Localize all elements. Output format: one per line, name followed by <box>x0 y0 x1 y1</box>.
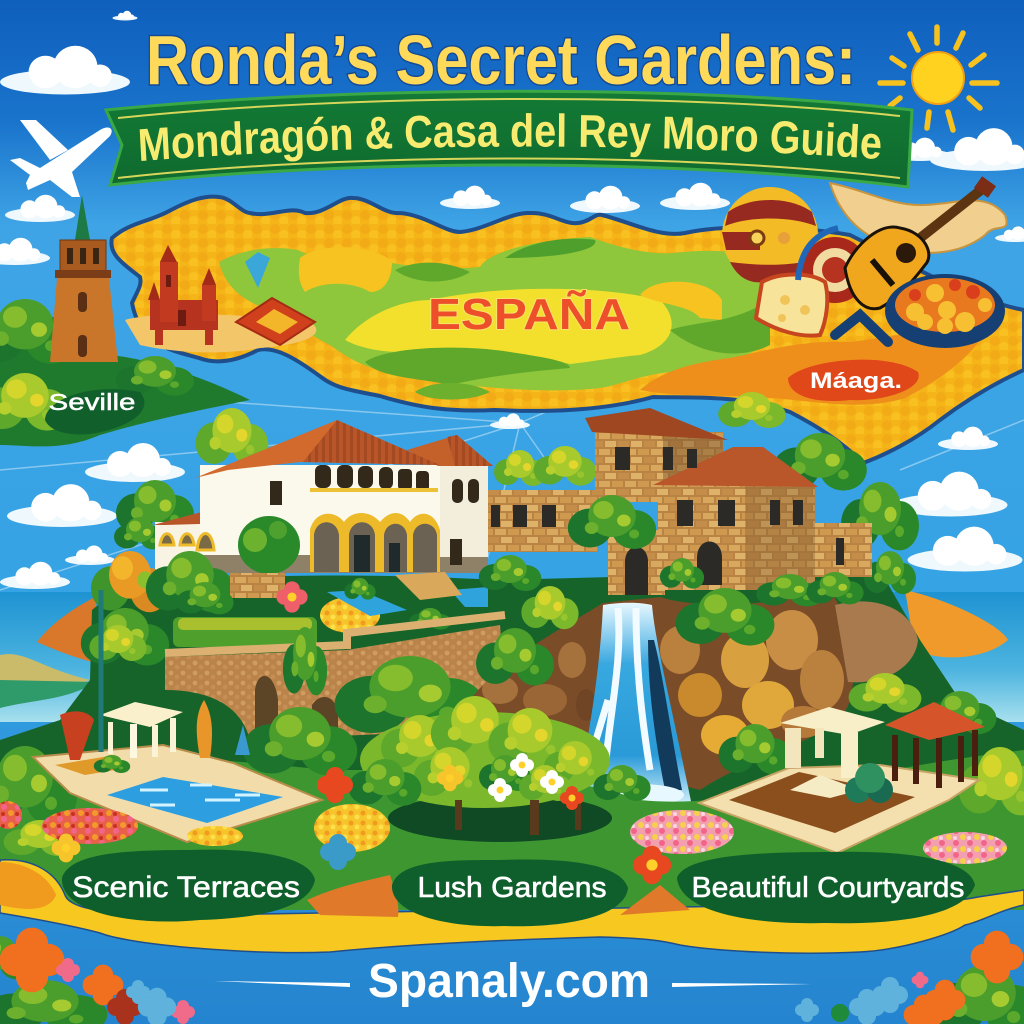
sea horizon <box>0 592 1024 722</box>
footer: Spanaly.com: Spanaly.com <box>368 955 650 1008</box>
arcade <box>310 513 440 572</box>
map of Spain <box>111 197 1024 463</box>
label: Máaga <box>788 360 919 401</box>
bread <box>756 274 827 336</box>
title: Ronda’s Secret Gardens: <box>146 21 856 99</box>
lamp post <box>98 590 104 752</box>
left rock and island <box>0 597 105 708</box>
golden map trees and green mounds <box>299 239 770 400</box>
fountain pool terrace <box>33 590 322 842</box>
wing arches <box>160 534 214 550</box>
label: Seville: Seville <box>48 389 136 415</box>
right sea rock <box>905 590 1008 657</box>
front gardens foliage <box>0 673 1024 910</box>
right courtyard with gazebos <box>699 702 985 853</box>
terraced gardens <box>81 551 488 666</box>
roofs <box>407 435 493 466</box>
castle bushes <box>568 495 704 589</box>
airplane icon <box>10 120 112 197</box>
map icon: red tile <box>236 252 315 345</box>
sun icon <box>880 27 997 130</box>
label: Beautiful Courtyards: Beautiful Courtyards <box>692 872 964 904</box>
culture cluster: hat, bread, guitar, paella <box>722 182 1007 348</box>
subtitle ribbon <box>104 90 914 189</box>
label: Lush Gardens: Lush Gardens <box>418 872 606 904</box>
Seville island <box>0 299 250 446</box>
red castle <box>148 245 218 345</box>
label: Máaga: Máaga. <box>810 368 902 393</box>
label: Scenic Terraces: Scenic Terraces <box>72 871 300 904</box>
beach behind castle <box>125 314 316 352</box>
windows <box>270 465 479 565</box>
statue <box>197 700 212 758</box>
pergola <box>100 702 183 758</box>
stone castle Casa del Rey Moro <box>488 408 872 595</box>
waterfall <box>575 603 692 806</box>
main hill <box>0 570 1024 900</box>
sandy path <box>0 860 1024 953</box>
label: Beautiful Courtyards <box>677 852 975 923</box>
stone wall <box>165 615 505 740</box>
topiary bush <box>238 516 300 574</box>
flower beds <box>0 753 1007 884</box>
tool <box>835 315 888 342</box>
sea rays <box>0 370 1024 590</box>
distant trees <box>114 392 919 594</box>
bottom corner flowers <box>0 928 1024 1024</box>
cliff rock <box>470 555 918 790</box>
subtitle ribbon: Mondragón & Casa del Rey Moro Guide <box>140 113 880 162</box>
clouds <box>0 11 1024 589</box>
Mondragón palace <box>153 420 493 573</box>
footer: Spanaly.com <box>214 955 812 1008</box>
Seville tower <box>50 195 118 362</box>
orange south coast <box>640 318 990 405</box>
label: Scenic Terraces <box>62 850 315 922</box>
map label: España: ESPAÑA <box>428 289 630 339</box>
paella <box>885 274 1005 348</box>
label: Lush Gardens <box>392 860 628 926</box>
guitar <box>845 182 992 309</box>
